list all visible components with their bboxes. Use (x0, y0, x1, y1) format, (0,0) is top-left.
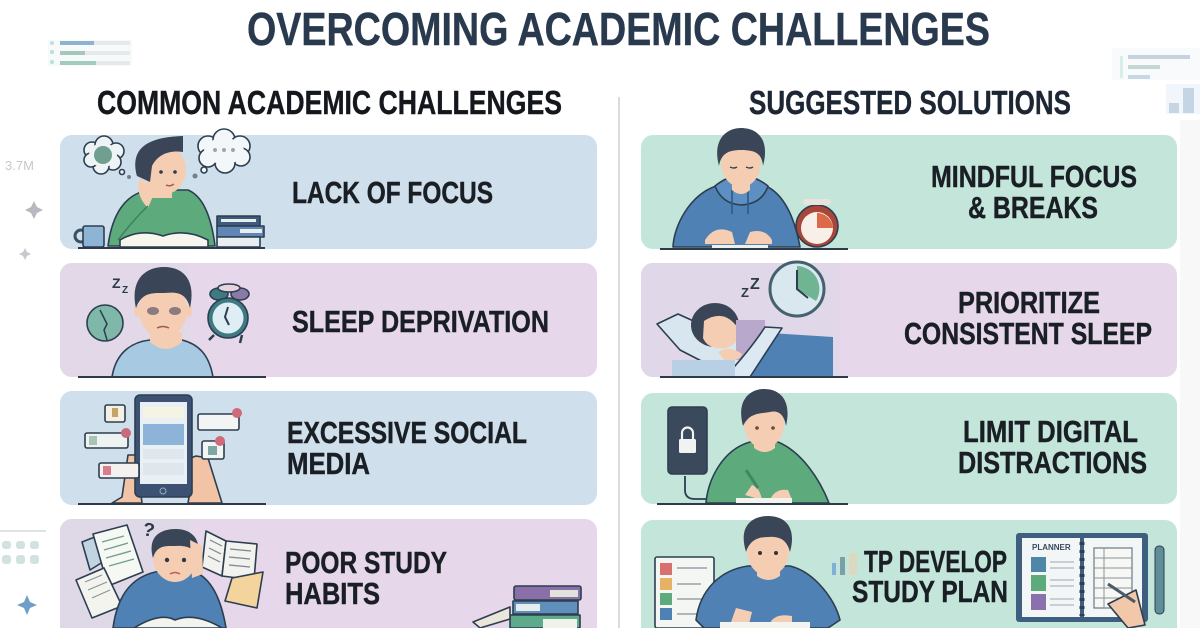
panel: prioritize consistent sleep: Z (750, 276, 760, 293)
label: LIMIT DIGITAL (963, 414, 1138, 449)
decoration: faint stat and sparkles left (5, 158, 43, 260)
panel: poor study habits (60, 519, 597, 628)
label: EXCESSIVE SOCIAL (287, 415, 527, 450)
icon: planner and hand (1016, 533, 1148, 628)
icon: student in green sweater (108, 136, 215, 246)
icon: stressed student (113, 529, 226, 628)
icon: wall clock (770, 262, 824, 316)
icon: smartphone with feed (135, 395, 192, 497)
label (958, 414, 1147, 480)
label: HABITS (285, 576, 380, 611)
label: LACK OF FOCUS (292, 175, 493, 210)
icon: alarm clock (208, 284, 249, 343)
decoration: faint stat and sparkles left: 3.7M (5, 158, 34, 173)
icon: tired student (112, 267, 213, 377)
label: POOR STUDY (285, 545, 447, 580)
decoration: faint list top left (48, 40, 132, 66)
icon: thought bubbles (84, 129, 250, 179)
icon: open notebook (202, 531, 263, 608)
icon: checklist (655, 557, 714, 628)
label: MEDIA (287, 446, 370, 481)
label: & BREAKS (968, 190, 1098, 225)
icon: student in blue sweater writing (696, 516, 840, 628)
label (287, 415, 527, 481)
label: STUDY PLAN (852, 574, 1008, 609)
panel: limit digital distractions (641, 389, 1177, 505)
heading: suggested solutions: SUGGESTED SOLUTIONS (749, 84, 1071, 121)
icon: stack of books (217, 216, 264, 247)
icon: student in green sweater writing (706, 389, 829, 503)
icon: broken clock (87, 305, 123, 341)
label (931, 159, 1137, 225)
icon: planner and hand: PLANNER (1032, 543, 1071, 552)
label: PRIORITIZE (958, 285, 1100, 320)
decoration: stray bar marks (832, 553, 857, 575)
panel: mindful focus and breaks (641, 128, 1177, 250)
panel: sleep deprivation (60, 263, 597, 378)
icon: student in hoodie writing (673, 128, 800, 248)
label: SLEEP DEPRIVATION (292, 304, 549, 339)
decoration: faint bar chart top right (1166, 84, 1200, 114)
icon: timer clock (796, 199, 838, 247)
icon: hands holding phone (112, 455, 222, 503)
label (852, 544, 1008, 609)
panel: sleep deprivation: Z (122, 285, 128, 296)
decoration: faint list top right (1112, 48, 1200, 80)
icon: open book (120, 233, 208, 247)
title: OVERCOMING ACADEMIC CHALLENGES (247, 3, 990, 55)
icon: stack of books (473, 586, 581, 628)
decoration: blue sparkle (17, 595, 37, 615)
icon: coffee cup (75, 226, 104, 247)
panel: develop study plan (641, 516, 1177, 628)
icon: pen (1155, 546, 1164, 614)
panel: excessive social media (60, 391, 597, 505)
icon: notification bubbles (85, 405, 242, 478)
icon: zz: Z (741, 285, 749, 300)
label (285, 545, 447, 611)
label (904, 285, 1152, 351)
icon: scattered papers: ? (141, 519, 156, 542)
decoration: faint dots bottom left (0, 530, 46, 564)
label: DISTRACTIONS (958, 445, 1147, 480)
icon: scattered papers (76, 519, 156, 618)
label: MINDFUL FOCUS (931, 159, 1137, 194)
icon: locked phone (668, 407, 712, 499)
panel: prioritize consistent sleep (641, 262, 1177, 378)
panel: lack of focus (60, 129, 597, 249)
label: TP DEVELOP (864, 544, 1007, 579)
icon: zz: Z (112, 275, 121, 291)
icon: sleeping student with pillow and blanket (657, 303, 833, 377)
heading: common academic challenges: COMMON ACADEMIC CHALLENGES (97, 84, 562, 121)
